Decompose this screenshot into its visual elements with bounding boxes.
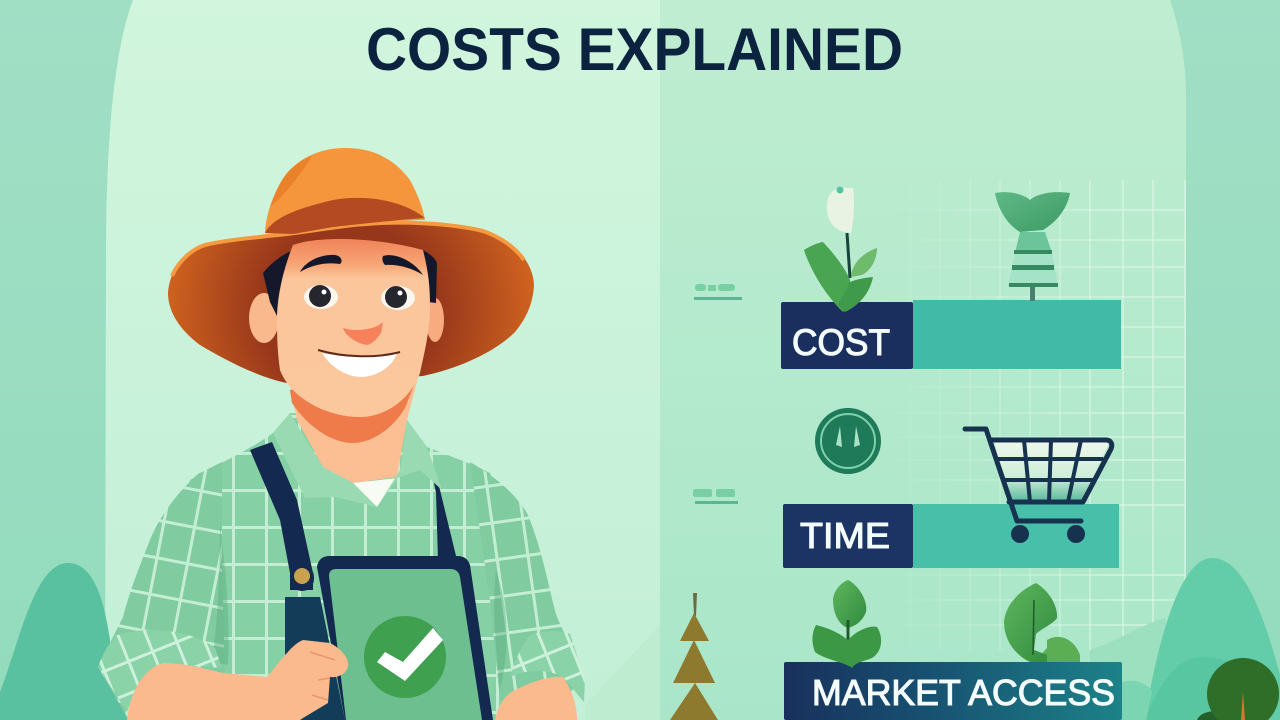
ear: left xyxy=(249,293,279,343)
eye: left xyxy=(304,285,338,309)
panel: left arch xyxy=(105,0,660,720)
farmer illustration xyxy=(98,148,585,720)
icon: tulip xyxy=(804,186,877,312)
hair xyxy=(263,250,437,318)
item: market access xyxy=(784,580,1122,720)
face xyxy=(277,239,430,417)
item: time xyxy=(693,408,1119,568)
neck xyxy=(290,370,420,483)
icon: clock badge xyxy=(815,408,881,474)
eye: right xyxy=(381,286,415,310)
icon: leaf vase xyxy=(995,192,1070,301)
panel: right arch xyxy=(660,0,1186,720)
suspender: left xyxy=(250,442,313,590)
shirt: right sleeve xyxy=(470,462,585,700)
market access label: MARKET ACCESS xyxy=(812,672,1115,713)
time label: TIME xyxy=(800,515,890,556)
tablet screen xyxy=(329,569,482,720)
collar xyxy=(273,413,442,507)
brim rim highlight xyxy=(172,223,524,276)
tree: right foreground xyxy=(1197,658,1279,720)
crown shade xyxy=(270,156,312,207)
tablet frame xyxy=(317,556,493,720)
cost bar: teal xyxy=(913,300,1121,369)
title: COSTS EXPLAINED xyxy=(366,16,903,83)
hill: bottom left xyxy=(0,563,128,720)
time bar: navy xyxy=(783,504,913,568)
eyebrows xyxy=(300,255,423,275)
time bar: teal xyxy=(913,504,1119,568)
shirt: left sleeve xyxy=(98,462,225,717)
icon: seedling left xyxy=(812,580,881,668)
check icon xyxy=(364,616,446,698)
background hill: soft left-panel slope xyxy=(585,625,660,720)
market access bar xyxy=(784,662,1122,720)
grid backdrop xyxy=(880,180,1185,650)
tree: centre pine xyxy=(670,593,718,720)
small caption: time xyxy=(693,489,738,504)
cost label: COST xyxy=(792,322,890,363)
hat brim xyxy=(168,222,534,383)
icon: shopping cart xyxy=(965,429,1112,543)
suspender button xyxy=(290,565,314,591)
hat band xyxy=(265,198,425,234)
cuff: left xyxy=(98,630,222,712)
undershirt xyxy=(353,478,397,507)
arm: right xyxy=(495,677,577,720)
small caption: cost xyxy=(694,284,742,300)
cuff: right xyxy=(510,631,585,702)
shirt: sleeve shading xyxy=(212,525,507,690)
ear: right xyxy=(426,298,444,342)
smile xyxy=(318,350,400,377)
hat crown xyxy=(265,148,425,234)
neck shadow xyxy=(290,375,418,443)
hills: bottom right xyxy=(1090,558,1280,720)
item: cost xyxy=(694,186,1121,369)
icon: seedling right xyxy=(1004,583,1080,662)
arm and hand: left xyxy=(127,640,348,720)
cost bar: navy xyxy=(781,302,913,369)
nose xyxy=(343,322,383,345)
overall bib xyxy=(285,597,345,720)
shirt: torso xyxy=(160,413,520,720)
suspender: right xyxy=(427,447,457,560)
